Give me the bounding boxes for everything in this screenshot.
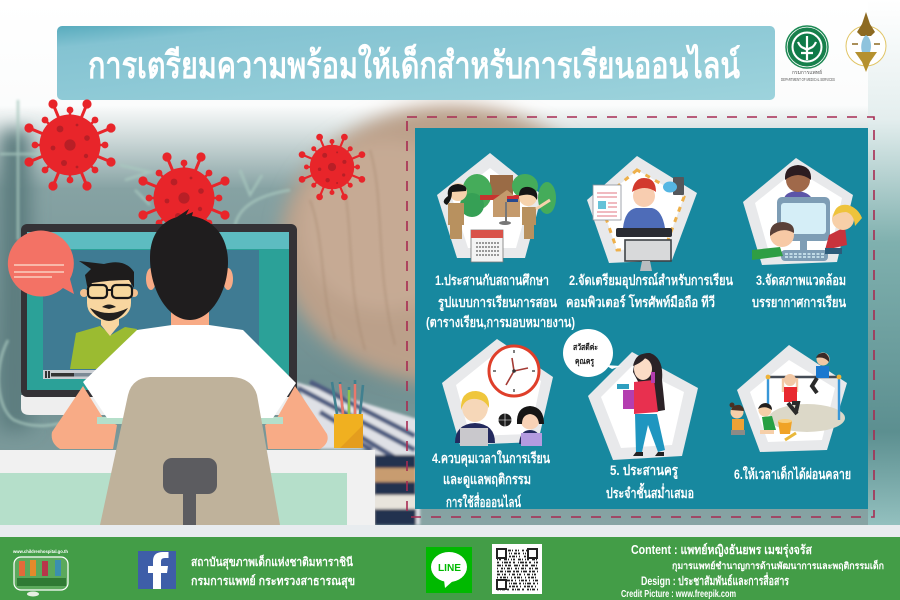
desk [0, 450, 375, 525]
icon: line [426, 547, 472, 593]
step 4 text: การใช้สื่อออนไลน์ [446, 492, 521, 510]
virus middle [138, 152, 230, 244]
step 2 text [566, 272, 733, 310]
step 3 text: บรรยากาศการเรียน [752, 294, 846, 310]
step 4 text [432, 449, 550, 510]
bucket and spade [778, 419, 796, 440]
step 4 [432, 339, 553, 510]
person at desk [616, 178, 672, 237]
trees and school [460, 174, 556, 225]
monkey bars [766, 375, 841, 420]
monitor [21, 224, 297, 415]
step 3 text: 3.จัดสภาพแวดล้อม [756, 272, 846, 288]
child on bar [812, 352, 830, 393]
step 1 text [426, 272, 575, 330]
footer credits [621, 542, 884, 600]
step 2 text: คอมพิวเตอร์ โทรศัพท์มือถือ ทีวี [566, 293, 715, 310]
step 6 [730, 345, 851, 482]
step 3 text [752, 272, 846, 310]
step 1 text: 1.ประสานกับสถานศึกษา [435, 272, 549, 288]
step 5 [563, 329, 698, 501]
pencil cup [332, 380, 363, 448]
footer credits: Credit Picture : www.freepik.com [621, 589, 736, 600]
footer credits: Design : ประชาสัมพันธ์และการสื่อสาร [641, 572, 789, 588]
sand pit [769, 404, 845, 432]
speech bubble [8, 231, 74, 297]
logo: department of medical services [781, 26, 835, 82]
logo: children's hospital [12, 549, 68, 596]
man with laptop [455, 391, 495, 446]
footer organisation text: กรมการแพทย์ กระทรวงสาธารณสุข [191, 574, 355, 589]
footer organisation text [191, 554, 355, 589]
clock [489, 346, 539, 396]
footer credits: Content : แพทย์หญิงธันยพร เมฆรุ่งจรัส [631, 542, 812, 558]
on-screen teacher [70, 261, 138, 369]
teacher on phone [617, 353, 665, 456]
panel: six preparation steps [415, 128, 868, 510]
greeting bubble: สวัสดีค่ะ [573, 342, 598, 352]
footer organisation text: สถาบันสุขภาพเด็กแห่งชาติมหาราชินี [191, 554, 354, 570]
illustration: student at computer [0, 209, 375, 525]
globe [498, 414, 512, 426]
student body [52, 209, 328, 449]
logo: department of medical services: กรมการแพทย์ [792, 69, 822, 76]
teacher woman [444, 183, 467, 239]
teacher man [519, 187, 550, 239]
logo: royal emblem [846, 12, 886, 72]
computer [777, 197, 830, 261]
children in sand [730, 402, 776, 435]
step 3 [743, 158, 862, 310]
step 1 text: รูปแบบการเรียนการสอน [438, 294, 557, 311]
step 2 [566, 156, 733, 310]
step 5 text: 5. ประสานครู [610, 462, 678, 479]
step 4 text: 4.ควบคุมเวลาในการเรียน [432, 449, 550, 467]
greeting bubble: คุณครู [575, 356, 594, 367]
logo: children's hospital: www.childrenhospital.go.th [12, 549, 68, 554]
document [593, 185, 621, 220]
logo: department of medical services: DEPARTMENT OF MEDICAL SERVICES [781, 77, 835, 82]
step 1 text: (ตารางเรียน,การมอบหมายงาน) [426, 314, 575, 330]
footer credits: กุมารแพทย์ชำนาญการด้านพัฒนาการและพฤติกรรมเด็ก [672, 559, 884, 572]
child behind computer [784, 165, 812, 199]
chair [100, 377, 280, 525]
step 6 text: 6.ให้เวลาเด็กได้ผ่อนคลาย [734, 465, 851, 482]
step 5 text [606, 462, 694, 501]
step 2 text: 2.จัดเตรียมอุปกรณ์สำหรับการเรียน [569, 272, 733, 289]
child hanging [783, 374, 798, 414]
title bar [57, 26, 775, 100]
virus small [299, 134, 365, 200]
qr code [492, 544, 542, 594]
greeting bubble [563, 329, 621, 377]
icon: line: LINE [438, 563, 461, 574]
girl with laptop [517, 406, 544, 446]
boy [752, 222, 794, 260]
icon: facebook [138, 551, 176, 589]
step 1 [426, 153, 575, 330]
footer [0, 537, 900, 600]
step 5 text: ประจำชั้นสม่ำเสมอ [606, 482, 694, 501]
step 4 text: และดูแลพฤติกรรม [443, 471, 531, 488]
girl [825, 205, 862, 254]
strip under illustration [0, 525, 900, 538]
virus large [24, 99, 116, 191]
dashed frame [407, 117, 874, 517]
calendar [471, 230, 503, 262]
phone and message [663, 177, 684, 195]
monitor [625, 240, 671, 271]
